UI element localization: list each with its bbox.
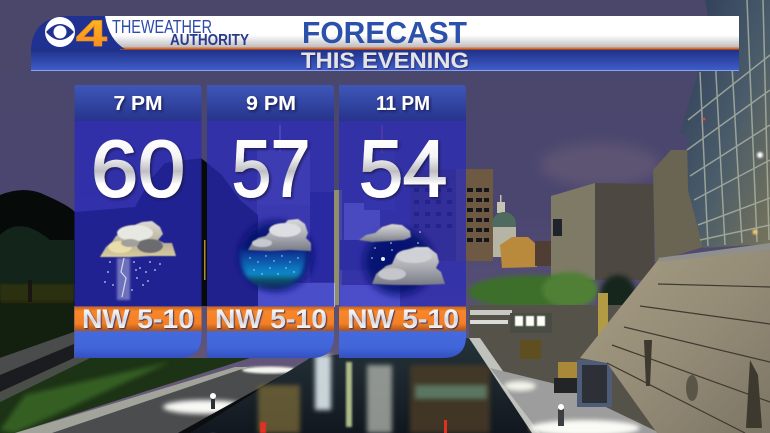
plaza with work site	[469, 293, 660, 433]
logo text: THEWEATHER	[112, 17, 212, 37]
walkway	[15, 362, 314, 433]
temperature: 60	[91, 124, 185, 213]
subtitle: this evening: THIS EVENING	[301, 48, 469, 73]
time header: 7 PM	[114, 93, 162, 115]
time header: 11 PM	[376, 93, 430, 115]
wind band: NW 5-10	[347, 304, 459, 334]
logo text	[112, 17, 250, 49]
panel: 7 PM	[74, 85, 202, 358]
building windows	[414, 188, 489, 242]
time header	[207, 85, 334, 121]
logo dome	[31, 16, 125, 49]
time header	[74, 85, 202, 121]
glass atrium	[680, 0, 770, 248]
footer	[74, 331, 202, 358]
logo text: AUTHORITY	[170, 32, 250, 49]
capitol dome	[492, 195, 552, 268]
concrete terrace wall	[580, 243, 770, 433]
icon: partly cloudy night	[359, 224, 445, 300]
road and lawn at left	[0, 304, 250, 433]
icon: thunderstorm cloud	[100, 221, 176, 300]
temperature: 57	[232, 124, 310, 213]
title: forecast: FORECAST	[302, 15, 467, 50]
icon: snow cloud	[234, 216, 318, 296]
banner	[31, 13, 739, 73]
concrete buildings	[551, 150, 703, 280]
wind band: NW 5-10	[82, 304, 194, 334]
channel number 4: 4	[76, 13, 108, 54]
banner white bar	[100, 16, 739, 50]
temperature: 54	[359, 124, 447, 213]
canal reflection	[190, 338, 532, 433]
icon: CBS eye	[45, 17, 75, 47]
wind band: NW 5-10	[215, 304, 327, 334]
banner blue strip	[31, 49, 739, 71]
skyline towers	[255, 125, 493, 307]
footer	[207, 331, 334, 358]
time header	[339, 85, 466, 121]
time header: 9 PM	[246, 93, 296, 115]
panel: 9 PM	[207, 85, 334, 358]
panel: 11 PM	[339, 85, 466, 358]
footer	[339, 331, 466, 358]
trees	[0, 158, 636, 315]
